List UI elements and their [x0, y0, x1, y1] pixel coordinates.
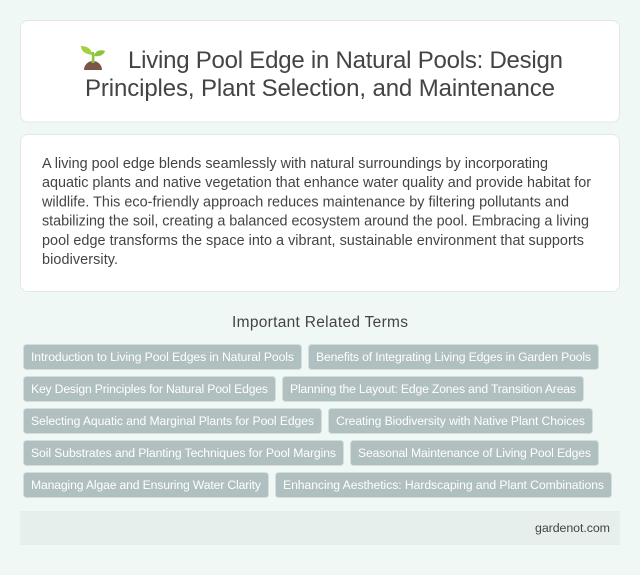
chip — [24, 344, 302, 370]
description text: A living pool edge blends seamlessly with natural surroundings by incorporating — [42, 156, 548, 172]
chip: Introduction to Living Pool Edges in Natural Pools — [31, 350, 294, 364]
description text: aquatic plants and native vegetation that enhance water quality and provide habitat for — [42, 175, 591, 191]
title: Living Pool Edge in Natural Pools: Design — [128, 47, 563, 74]
title — [85, 47, 563, 102]
chip: Selecting Aquatic and Marginal Plants for Pool Edges — [31, 414, 314, 428]
chip: Enhancing Aesthetics: Hardscaping and Plant Combinations — [283, 478, 604, 492]
heading: related terms: Important Related Terms — [232, 314, 408, 331]
chip: Managing Algae and Ensuring Water Clarity — [31, 478, 262, 492]
footer — [20, 511, 620, 545]
chip — [24, 440, 344, 466]
related terms chips — [24, 344, 612, 498]
title: Principles, Plant Selection, and Maintenance — [85, 75, 555, 102]
chip — [328, 408, 592, 434]
chip — [24, 408, 322, 434]
icon: sprout — [81, 46, 105, 70]
chip — [24, 376, 276, 402]
description text: pool edge transforms the space into a vibrant, sustainable environment that supports — [42, 233, 584, 249]
chip: Soil Substrates and Planting Techniques for Pool Margins — [31, 446, 336, 460]
chip: Benefits of Integrating Living Edges in Garden Pools — [316, 350, 591, 364]
chip — [276, 472, 612, 498]
chip — [350, 440, 598, 466]
chip: Planning the Layout: Edge Zones and Transition Areas — [290, 382, 576, 396]
footer: gardenot.com — [535, 521, 610, 535]
description text: stabilizing the soil, creating a balanced ecosystem around the pool. Embracing a living — [42, 214, 589, 230]
panel: description — [20, 134, 620, 292]
chip — [282, 376, 584, 402]
chip: Seasonal Maintenance of Living Pool Edges — [358, 446, 591, 460]
chip: Key Design Principles for Natural Pool Edges — [31, 382, 268, 396]
chip: Creating Biodiversity with Native Plant Choices — [336, 414, 585, 428]
chip — [308, 344, 598, 370]
description text — [41, 156, 591, 268]
panel: title card — [20, 20, 620, 122]
description text: wildlife. This eco-friendly approach reduces maintenance by filtering pollutants and — [41, 194, 569, 210]
description text: biodiversity. — [42, 252, 118, 268]
chip — [24, 472, 268, 498]
